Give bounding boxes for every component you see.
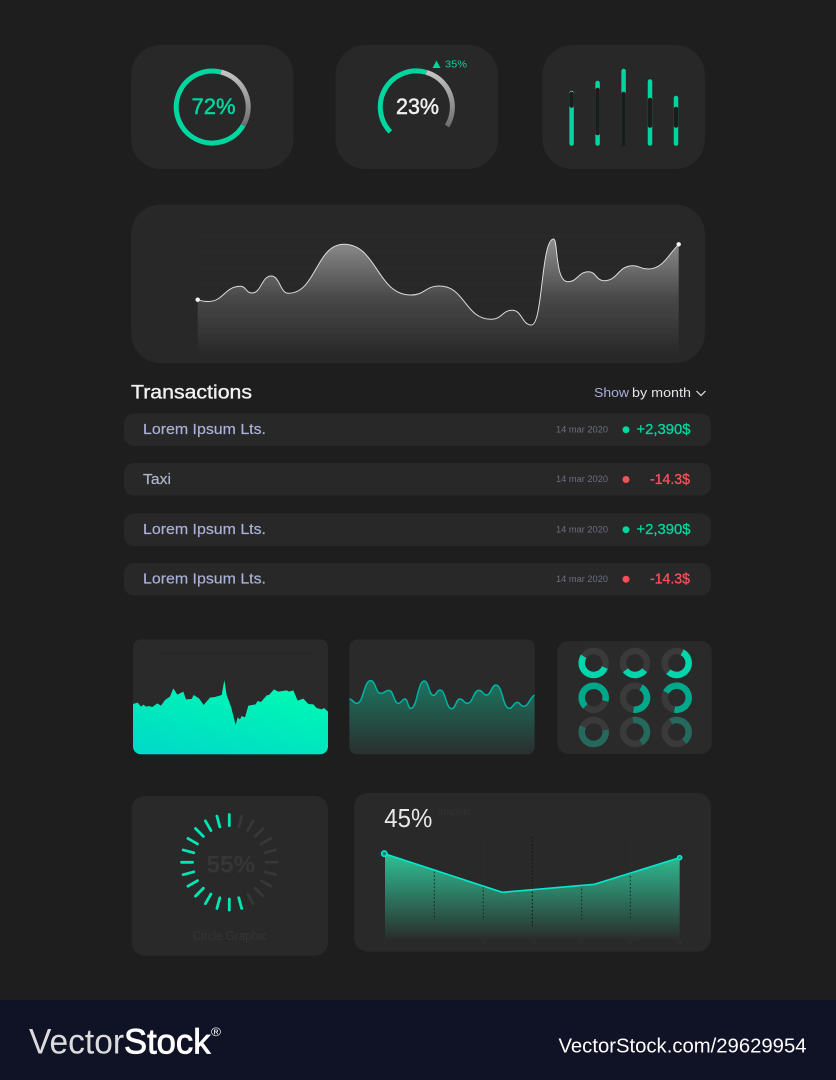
row: transaction 2: 14 mar 2020 [556, 474, 608, 485]
row: transaction 1: +2,390$ [636, 421, 691, 438]
donut values: row 2 [577, 681, 693, 715]
url text: VectorStock.com/29629954 [558, 1035, 806, 1058]
logo: VectorStock: Stock [124, 1022, 211, 1062]
donut values: row 1 [578, 646, 693, 680]
logo: VectorStock: ® [211, 1025, 221, 1039]
ring: 72% progress [176, 71, 248, 143]
value: 55%: 55% [206, 852, 255, 878]
area fill [198, 239, 679, 356]
slider bars [572, 71, 676, 144]
end points [196, 242, 681, 302]
axis labels: 04 [578, 940, 584, 946]
panel: sliders [542, 45, 705, 169]
axis labels: 06 [481, 940, 487, 946]
row: transaction 4: 14 mar 2020 [556, 574, 608, 585]
footer band [0, 1000, 836, 1080]
panel: donut grid [557, 641, 712, 754]
axis labels: 08 [531, 940, 536, 946]
row: transaction 4: Lorem Ipsum Lts. [143, 570, 266, 588]
trend: up 35%: 35% [445, 58, 467, 70]
donut values: row 3 [580, 716, 693, 748]
row: transaction 2 [124, 463, 711, 496]
line series [384, 854, 680, 892]
tick ring: active ticks [182, 814, 242, 910]
teal area [133, 680, 328, 754]
end markers [382, 851, 682, 860]
logo: VectorStock [29, 1022, 221, 1062]
value: 23%: 23% [396, 94, 439, 119]
row: transaction 4 [124, 563, 711, 596]
donut tracks [582, 651, 689, 744]
row: transaction 3: 14 mar 2020 [556, 524, 608, 536]
row: transaction 2: Taxi [143, 471, 171, 488]
panel: 23% ring [336, 45, 498, 169]
trend: up 35% [432, 58, 467, 70]
area fill [385, 854, 680, 940]
value: 45%: 45% [384, 803, 432, 833]
row: transaction 2: -14.3$ [650, 471, 691, 488]
tick ring: inactive ticks [239, 816, 277, 904]
row: transaction 3: +2,390$ [636, 521, 691, 538]
panel: solid teal area chart [133, 639, 328, 754]
line series [198, 239, 679, 325]
row: transaction 1 [124, 414, 711, 446]
row: transaction 3 [124, 514, 711, 546]
row: transaction 4: -14.3$ [650, 570, 691, 588]
ring: 23% gauge [380, 71, 452, 132]
panel: teal wave chart [349, 639, 535, 754]
panel: 72% ring [131, 45, 294, 169]
axis labels: 07 [628, 940, 634, 946]
heading: Transactions: Transactions [131, 382, 252, 404]
chart plot [382, 837, 683, 946]
wave line [349, 681, 535, 709]
value: 72%: 72% [192, 94, 236, 119]
panel: 45% line chart [354, 793, 711, 952]
row: transaction 1: Lorem Ipsum Lts. [143, 421, 266, 438]
panel: main area chart [131, 204, 705, 363]
filter: show by month [594, 385, 706, 400]
wave fill [349, 681, 535, 754]
axis labels [384, 940, 683, 946]
caption: Circle Graphic: Circle Graphic [193, 929, 267, 943]
faint label: graphic: graphic [438, 807, 470, 818]
filter: show by month: by month [632, 385, 691, 400]
axis labels: 08 [677, 940, 683, 946]
panel: circle graphic 55% [132, 796, 328, 956]
row: transaction 1: 14 mar 2020 [556, 424, 608, 436]
logo: VectorStock: Vector [29, 1022, 124, 1062]
axis labels: 0 [384, 940, 387, 946]
filter: show by month: Show [594, 385, 630, 400]
row: transaction 3: Lorem Ipsum Lts. [143, 521, 266, 538]
